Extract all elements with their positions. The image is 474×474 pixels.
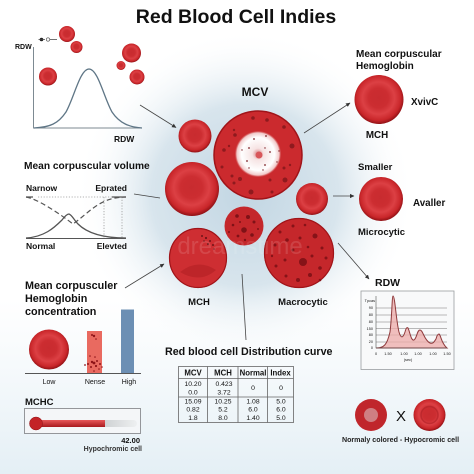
table header: MCV xyxy=(184,368,202,378)
panel: cell comparison xyxy=(342,399,459,444)
label: Macrocytic: Macrocytic xyxy=(278,297,328,308)
table body: 1.40 xyxy=(246,415,260,422)
bar labels: Nense xyxy=(85,379,105,386)
panel: mean corpuscular hemoglobin xyxy=(354,49,442,141)
x ticks: 1.00 xyxy=(429,352,437,356)
distribution curve xyxy=(34,69,142,128)
table body: 5.0 xyxy=(276,415,286,422)
cell: bottom left xyxy=(169,228,227,288)
cell: small right xyxy=(296,183,328,215)
cell xyxy=(359,177,403,221)
bar labels: High xyxy=(122,379,136,386)
heading: RDW xyxy=(375,277,400,289)
table body: 1.8 xyxy=(188,415,198,422)
y ticks: 80 xyxy=(369,333,373,337)
y ticks: 80 xyxy=(369,313,373,317)
x ticks xyxy=(375,352,451,362)
caption: Normaly colored - Hypocromic cell xyxy=(342,436,459,444)
cell: normally coloured xyxy=(355,399,387,431)
table body: 6.0 xyxy=(276,406,286,414)
gauge xyxy=(24,408,140,434)
panel: hemoglobin concentration xyxy=(24,280,142,453)
label: MCH: MCH xyxy=(366,130,388,141)
table body: 8.0 xyxy=(218,415,228,422)
x ticks: 0 xyxy=(375,352,377,356)
heading: MCHC: MCHC xyxy=(25,397,54,408)
label: XvivC: XvivC xyxy=(411,97,438,108)
heading: Red blood cell Distribution curve xyxy=(165,346,333,358)
x ticks: (sec) xyxy=(404,358,413,362)
x ticks: 1.50 xyxy=(443,352,451,356)
y ticks: 90 xyxy=(369,306,373,310)
gauge value: 42.00 xyxy=(121,436,140,445)
table header xyxy=(184,368,291,378)
bar: Nense xyxy=(84,331,103,373)
table header: MCH xyxy=(214,368,232,378)
label: Microcytic: Microcytic xyxy=(358,227,405,238)
cell: speckled centre xyxy=(224,206,264,246)
red cell xyxy=(29,330,69,370)
label: RDW axis: RDW xyxy=(15,44,32,51)
table body: 0.82 xyxy=(186,406,200,414)
label: RDW: RDW xyxy=(114,134,135,144)
arrows xyxy=(125,103,369,340)
bar labels xyxy=(43,379,136,386)
label: MCV: MCV xyxy=(242,85,268,99)
y ticks: 150 xyxy=(367,327,373,331)
title: Red Blood Cell Indies xyxy=(136,6,336,28)
central red cell cluster xyxy=(165,85,334,308)
table body: 5.2 xyxy=(218,406,228,414)
line chart xyxy=(26,197,126,238)
heading: Hemoglobin xyxy=(25,293,87,305)
table body: 6.0 xyxy=(248,406,258,414)
table body: 10.20 xyxy=(184,381,202,388)
cell: small upper left xyxy=(178,120,212,152)
heading: Mean corpusculer xyxy=(25,280,118,292)
histogram curve xyxy=(376,296,447,348)
table header: Normal xyxy=(240,368,266,378)
panel: hemoglobin concentration: Hypochromic cell xyxy=(84,446,142,453)
panel: RDW curve xyxy=(15,26,144,144)
grid xyxy=(376,308,447,342)
x ticks: 1.00 xyxy=(400,352,408,356)
table body: 5.0 xyxy=(276,398,286,406)
heading: concentration xyxy=(25,306,96,318)
y ticks xyxy=(365,299,375,350)
table body: 0 xyxy=(279,385,283,392)
cell xyxy=(354,75,404,124)
panel: microcytic xyxy=(358,162,446,238)
y ticks: 20 xyxy=(369,340,373,344)
panel: RDW histogram xyxy=(361,277,454,370)
y ticks: 0 xyxy=(371,346,373,350)
axes xyxy=(34,47,142,128)
table body: 0 xyxy=(251,385,255,392)
bar: High xyxy=(121,310,134,373)
panel: distribution table xyxy=(165,346,333,422)
axes xyxy=(376,296,447,348)
heading: Mean corpuscular volume xyxy=(24,161,150,172)
scattered red cells xyxy=(39,26,144,86)
y ticks: Tpcas xyxy=(365,299,375,303)
table body: 1.08 xyxy=(246,398,260,406)
table header: Index xyxy=(270,368,291,378)
label: Avaller: Avaller xyxy=(413,198,446,209)
watermark: dreamstime xyxy=(177,233,303,260)
table body xyxy=(184,381,286,422)
panel: mean corpuscular volume xyxy=(24,161,150,251)
multiply sign: X xyxy=(396,408,406,425)
table body: 3.72 xyxy=(217,390,231,396)
bar labels: Low xyxy=(43,379,56,386)
icon: small marker xyxy=(38,38,57,41)
heading: Mean corpuscular xyxy=(356,49,442,60)
cell: hypochromic xyxy=(414,399,446,431)
labels top: Narnow xyxy=(26,183,58,193)
cell: bottom right speckled xyxy=(264,218,334,288)
label: Smaller: Smaller xyxy=(358,162,393,173)
heading: Hemoglobin xyxy=(356,61,414,72)
panel: mean corpuscular volume: Eprated xyxy=(95,183,127,193)
x ticks: 1.00 xyxy=(414,352,422,356)
table body: 10.25 xyxy=(214,398,232,406)
cell: large with pale centre xyxy=(214,111,302,199)
table body: 0.423 xyxy=(215,381,233,388)
panel: mean corpuscular volume: Elevted xyxy=(97,241,127,251)
x ticks: 1.50 xyxy=(384,352,392,356)
y ticks: 80 xyxy=(369,320,373,324)
labels bottom: Normal xyxy=(26,241,55,251)
cell: left large xyxy=(165,162,219,216)
table grid xyxy=(178,366,294,422)
chart frame xyxy=(361,291,454,370)
label: MCH: MCH xyxy=(188,297,210,308)
table body: 15.09 xyxy=(184,398,202,406)
table body: 0.0 xyxy=(188,390,198,396)
